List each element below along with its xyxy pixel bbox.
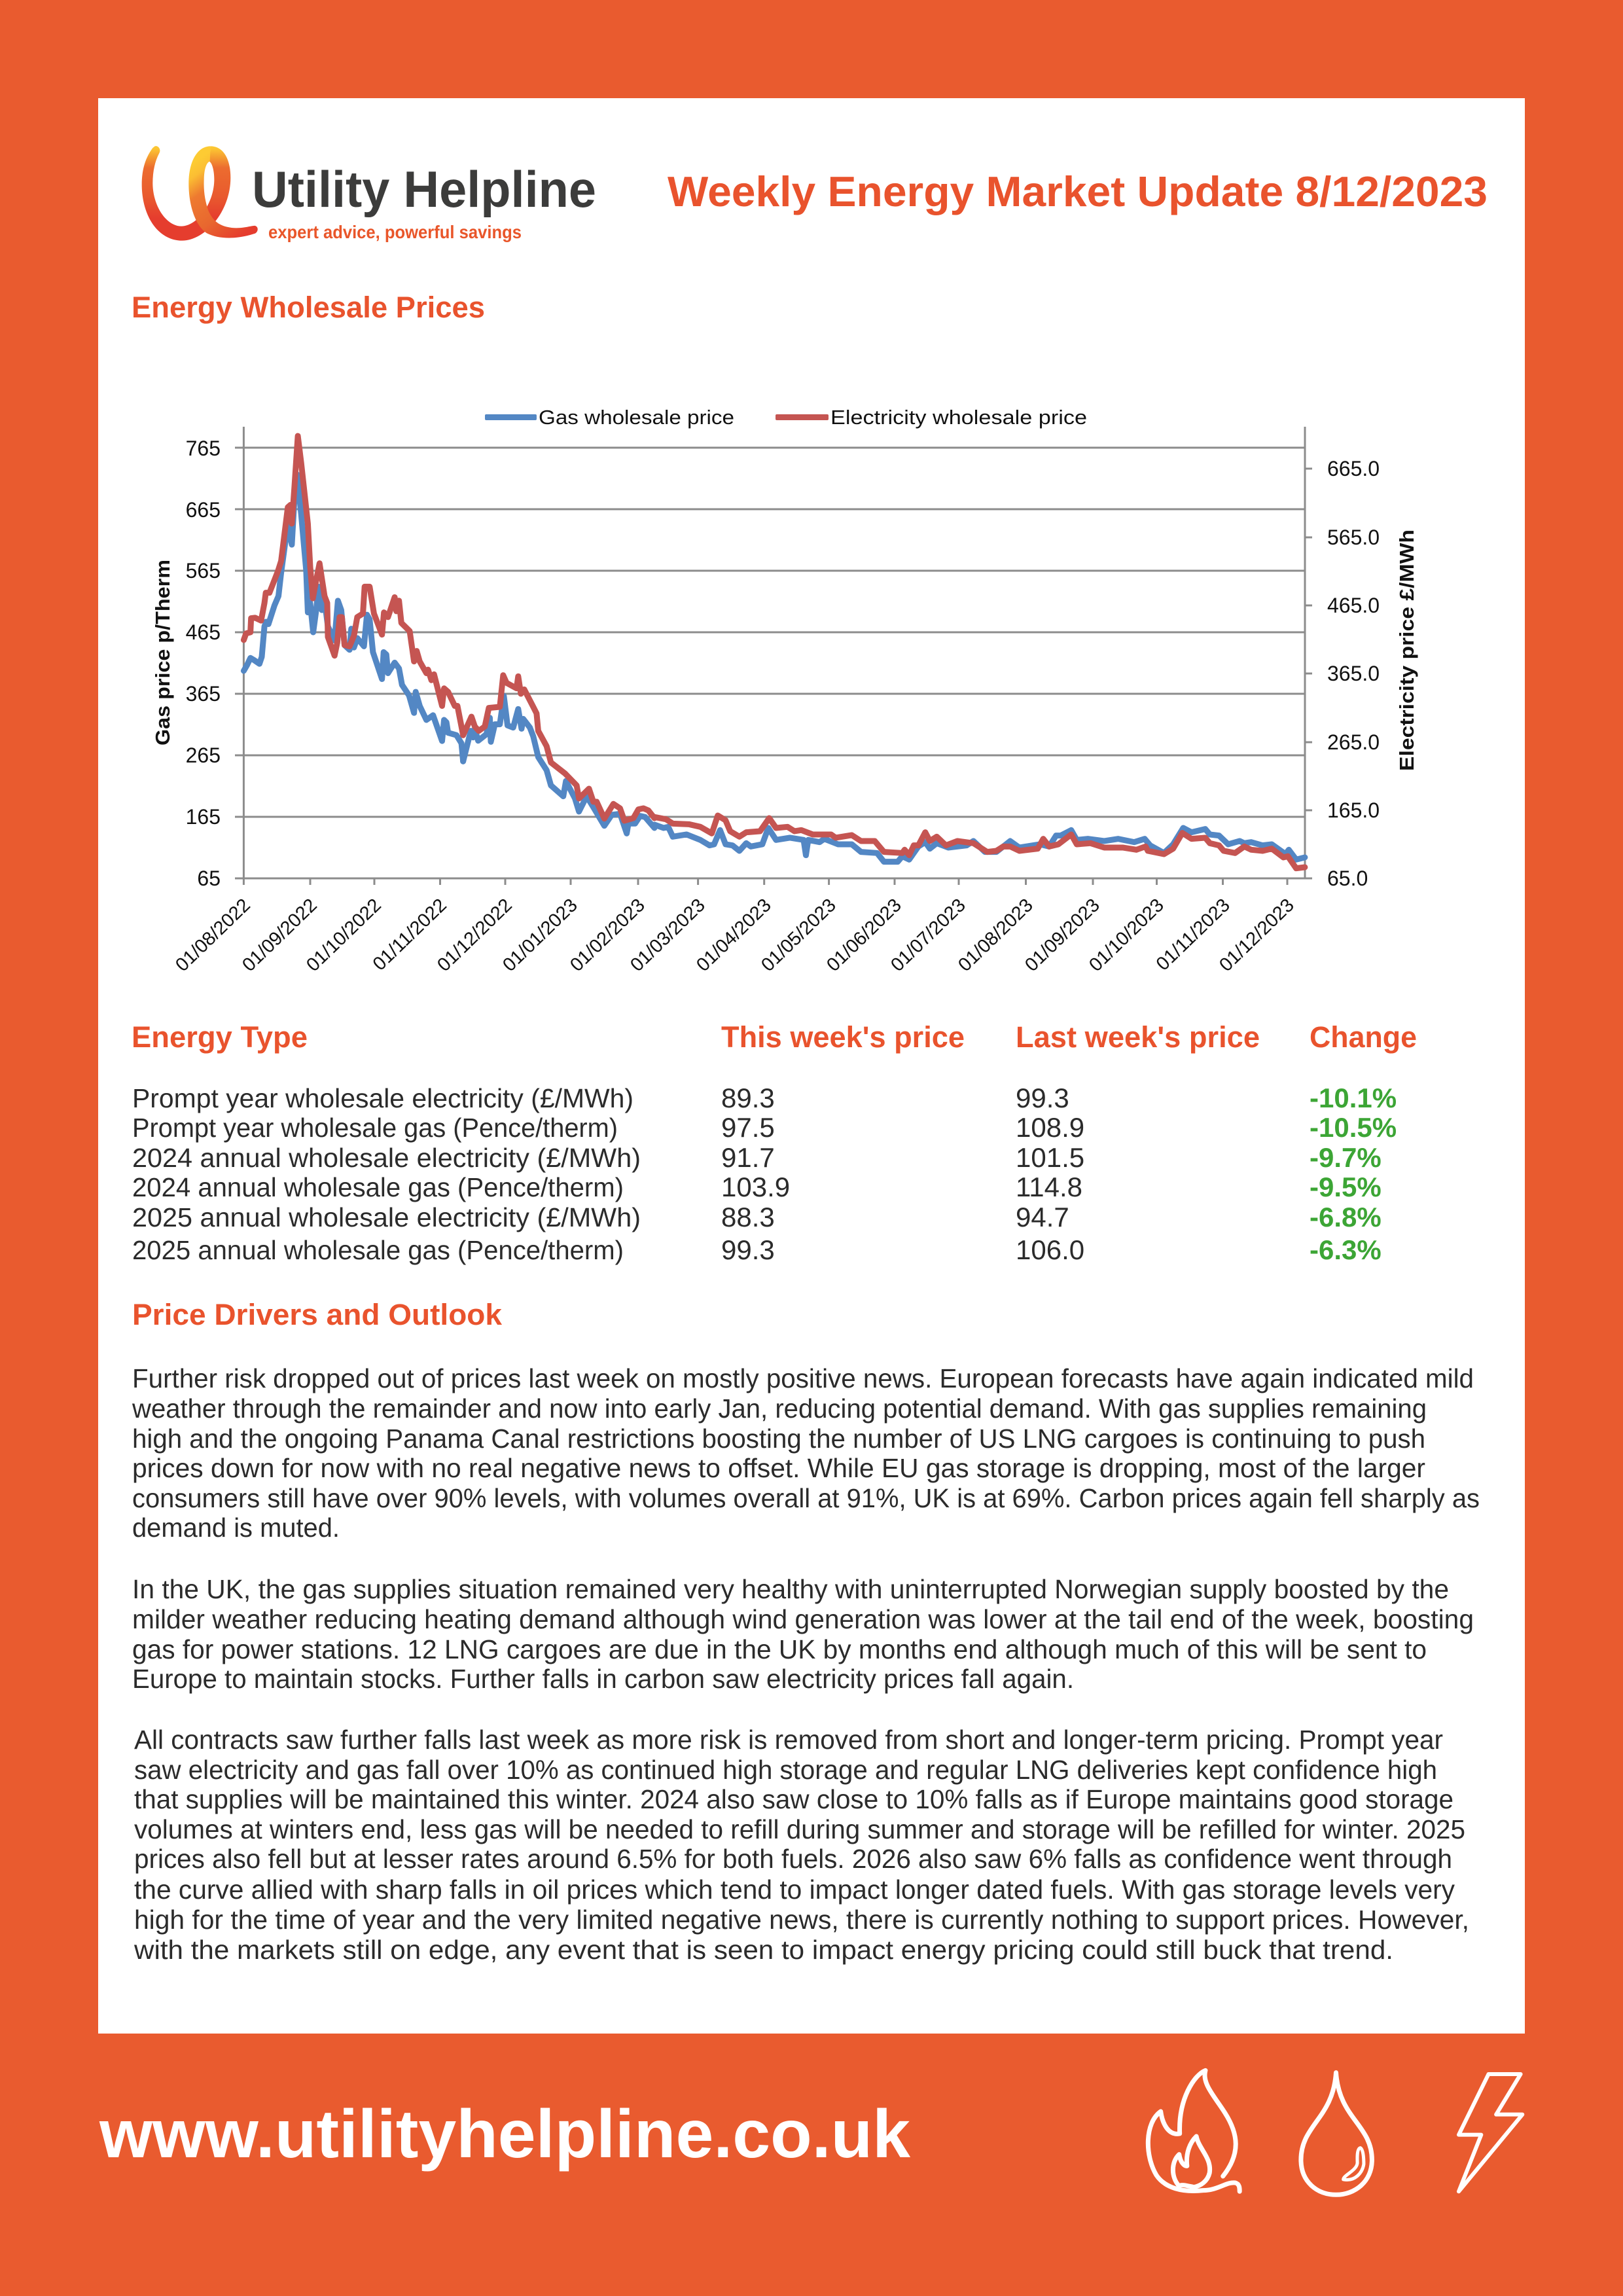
x axis date labels: 01/01/2023 (499, 895, 582, 976)
row: 2025 electricity: 94.7 (1016, 1202, 1069, 1232)
left axis labels: 265 (186, 744, 221, 767)
right axis labels: 465.0 (1327, 594, 1380, 617)
row: 2024 electricity (132, 1142, 1382, 1173)
left axis labels: 365 (186, 682, 221, 706)
left axis labels: 665 (186, 498, 221, 522)
left axis title: Gas price p/Therm (151, 560, 174, 745)
logo icon: looped U ribbon (142, 146, 258, 241)
paragraph 2: milder weather reducing heating demand although wind generation was lower at the tail end of the week, boosting (132, 1604, 1474, 1634)
left axis labels: 65 (197, 867, 221, 890)
row: 2024 electricity: 101.5 (1016, 1142, 1084, 1173)
x axis date labels: 01/11/2022 (369, 895, 451, 975)
x axis date labels: 01/09/2022 (238, 895, 321, 976)
left axis labels: 165 (186, 805, 221, 829)
row: 2025 electricity: 88.3 (721, 1202, 775, 1232)
logo tagline: expert advice, powerful savings (268, 222, 522, 242)
row: 2024 gas: 2024 annual wholesale gas (Pence/therm) (132, 1172, 624, 1202)
x axis date labels: 01/12/2022 (433, 895, 516, 976)
row: 2025 electricity (132, 1202, 1382, 1232)
row: prompt year gas: 108.9 (1016, 1112, 1084, 1143)
row: 2024 gas: -9.5% (1310, 1172, 1382, 1202)
x axis date labels: 01/06/2023 (823, 895, 906, 976)
row: 2024 electricity: -9.7% (1310, 1142, 1382, 1173)
paragraph 3: with the markets still on edge, any event that is seen to impact energy pricing could still buck that trend. (134, 1935, 1393, 1965)
paragraph 1 (132, 1363, 1480, 1543)
footer website url: www.utilityhelpline.co.uk (99, 2096, 910, 2172)
legend: electricity: Electricity wholesale price (830, 406, 1087, 429)
row: 2024 gas: 114.8 (1016, 1172, 1082, 1202)
x axis date labels: 01/07/2023 (887, 895, 970, 976)
row: prompt year gas: 97.5 (721, 1112, 775, 1143)
title: Weekly Energy Market Update 8/12/2023 (668, 168, 1488, 215)
row: prompt year electricity: Prompt year wholesale electricity (£/MWh) (132, 1083, 633, 1113)
logo: Utility Helpline (142, 146, 596, 242)
right axis labels: 165.0 (1327, 798, 1380, 822)
logo wordmark: Utility Helpline (252, 160, 596, 218)
row: 2024 gas (132, 1172, 1382, 1202)
right axis labels (1327, 457, 1380, 890)
paragraph 1: weather through the remainder and now into early Jan, reducing potential demand. With gas supplies remaining (132, 1393, 1427, 1424)
x axis date labels: 01/12/2023 (1215, 895, 1298, 976)
row: 2024 electricity: 2024 annual wholesale electricity (£/MWh) (132, 1143, 641, 1173)
paragraph 1: high and the ongoing Panama Canal restrictions boosting the number of US LNG cargoes is continuing to push (132, 1424, 1425, 1454)
table header row: This week's price (721, 1020, 965, 1054)
left axis labels: 765 (186, 437, 221, 460)
paragraph 3: volumes at winters end, less gas will be needed to refill during summer and storage will be refilled for winter. 2025 (134, 1814, 1465, 1844)
paragraph 3: saw electricity and gas fall over 10% as continued high storage and regular LNG deliveries kept confidence high (134, 1755, 1437, 1785)
electricity price line (red) (243, 436, 1305, 869)
paragraph 2 (132, 1574, 1474, 1694)
x axis date labels: 01/11/2023 (1152, 895, 1234, 975)
gas price line (blue) (243, 475, 1305, 862)
right axis labels: 565.0 (1327, 526, 1380, 549)
line chart: gas and electricity wholesale prices (151, 406, 1418, 976)
x axis date labels: 01/10/2022 (302, 895, 385, 976)
x axis date labels: 01/04/2023 (692, 895, 776, 976)
x axis date labels: 01/02/2023 (566, 895, 649, 976)
row: 2024 gas: 103.9 (721, 1172, 790, 1202)
paragraph 3 (134, 1725, 1469, 1965)
row: 2025 gas: -6.3% (1310, 1234, 1382, 1265)
row: 2025 electricity: 2025 annual wholesale electricity (£/MWh) (132, 1202, 641, 1232)
right axis title: Electricity price £/MWh (1395, 529, 1418, 771)
row: 2025 electricity: -6.8% (1310, 1202, 1382, 1232)
icon: flame (1148, 2070, 1240, 2191)
paragraph 1: prices down for now with no real negative news to offset. While EU gas storage is dropping, most of the larger (132, 1453, 1425, 1483)
white content panel (98, 98, 1525, 2034)
row: prompt year electricity (132, 1083, 1397, 1113)
icon: water drop (1301, 2073, 1372, 2195)
right axis labels: 65.0 (1327, 867, 1368, 890)
paragraph 3: prices also fell but at lesser rates around 6.5% for both fuels. 2026 also saw 6% falls as confidence went through (134, 1844, 1452, 1874)
right axis labels: 365.0 (1327, 662, 1380, 685)
row: 2024 electricity: 91.7 (721, 1142, 775, 1173)
paragraph 2: In the UK, the gas supplies situation remained very healthy with uninterrupted Norwegian supply boosted by the (132, 1574, 1449, 1604)
chart legend (485, 406, 1087, 429)
paragraph 2: Europe to maintain stocks. Further falls in carbon saw electricity prices fall again. (132, 1664, 1074, 1694)
x axis date labels: 01/08/2023 (954, 895, 1037, 976)
left axis labels: 565 (186, 559, 221, 583)
paragraph 1: Further risk dropped out of prices last week on mostly positive news. European forecasts have again indicated mild (132, 1363, 1474, 1393)
chart gridlines and axes (235, 427, 1312, 885)
row: prompt year gas (132, 1112, 1397, 1143)
price table (132, 1020, 1417, 1265)
right axis labels: 665.0 (1327, 457, 1380, 480)
paragraph 3: the curve allied with sharp falls in oil prices which tend to impact longer dated fuels. With gas storage levels very (134, 1874, 1455, 1905)
row: prompt year electricity: 89.3 (721, 1083, 775, 1113)
x axis date labels (171, 895, 1298, 976)
heading: Energy Wholesale Prices: Energy Wholesale Prices (132, 291, 485, 324)
row: prompt year gas: -10.5% (1310, 1112, 1397, 1143)
row: 2025 gas: 2025 annual wholesale gas (Pence/therm) (132, 1235, 624, 1265)
row: prompt year electricity: -10.1% (1310, 1083, 1397, 1113)
paragraph 3: All contracts saw further falls last week as more risk is removed from short and longer-term pricing. Prompt year (134, 1725, 1443, 1755)
x axis date labels: 01/10/2023 (1085, 895, 1168, 976)
x axis date labels: 01/08/2022 (171, 895, 255, 976)
paragraph 1: consumers still have over 90% levels, with volumes overall at 91%, UK is at 69%. Carbon prices again fell sharply as (132, 1483, 1480, 1513)
table header row: Last week's price (1016, 1020, 1260, 1054)
x axis date labels: 01/03/2023 (626, 895, 709, 976)
right axis labels: 265.0 (1327, 730, 1380, 754)
icon: lightning bolt (1459, 2074, 1522, 2191)
table header row (132, 1020, 1417, 1054)
row: prompt year gas: Prompt year wholesale gas (Pence/therm) (132, 1113, 618, 1143)
paragraph 3: that supplies will be maintained this winter. 2024 also saw close to 10% falls as if Europe maintains good storage (134, 1784, 1454, 1814)
row: prompt year electricity: 99.3 (1016, 1083, 1069, 1113)
row: 2025 gas: 99.3 (721, 1234, 775, 1265)
paragraph 3: high for the time of year and the very limited negative news, there is currently nothing to support prices. However, (134, 1905, 1469, 1935)
paragraph 2: gas for power stations. 12 LNG cargoes are due in the UK by months end although much of this will be sent to (132, 1634, 1427, 1664)
x axis date labels: 01/09/2023 (1021, 895, 1104, 976)
table header row: Energy Type (132, 1020, 308, 1054)
left axis labels (186, 437, 221, 890)
heading: Price Drivers and Outlook: Price Drivers and Outlook (132, 1298, 503, 1331)
row: 2025 gas: 106.0 (1016, 1234, 1084, 1265)
table header row: Change (1310, 1020, 1417, 1054)
left axis labels: 465 (186, 620, 221, 644)
paragraph 1: demand is muted. (132, 1513, 340, 1543)
x axis date labels: 01/05/2023 (757, 895, 840, 976)
row: 2025 gas (132, 1234, 1382, 1265)
legend: gas: Gas wholesale price (539, 406, 734, 429)
